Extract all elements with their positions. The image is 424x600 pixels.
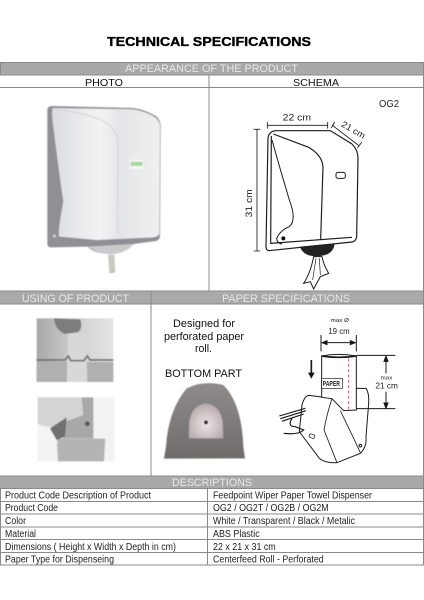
- row: color: [5, 516, 355, 527]
- column heading: schema: SCHEMA: [293, 77, 339, 89]
- dimension labels: 22 cm: [283, 112, 311, 122]
- row: dimensions: 22 x 21 x 31 cm: [213, 542, 276, 553]
- label: bottom part: BOTTOM PART: [165, 368, 242, 380]
- panel: using of product: [0, 291, 151, 461]
- title: TECHNICAL SPECIFICATIONS: [107, 34, 311, 49]
- photo: bottom part of dispenser: [164, 383, 245, 459]
- row: paper type: [5, 554, 324, 566]
- row: material: Material: [5, 529, 36, 540]
- direction arrow: [309, 360, 314, 375]
- row: description: [5, 490, 373, 502]
- roll label: [322, 378, 342, 388]
- dimension labels: 19 cm: [328, 327, 350, 336]
- row: description: Product Code Description of Product: [5, 490, 151, 502]
- dimension labels: max: [381, 375, 393, 381]
- section band: appearance: APPEARANCE OF THE PRODUCT: [125, 63, 298, 75]
- dimension labels: max Ø: [331, 318, 350, 324]
- row: paper type: Centerfeed Roll - Perforated: [213, 554, 324, 566]
- row: material: ABS Plastic: [213, 529, 260, 540]
- specification rows: [5, 490, 373, 566]
- dispenser body: [299, 388, 369, 463]
- note: designed for perforated paper roll: [164, 318, 244, 355]
- section band: descriptions: [0, 476, 424, 489]
- section band: using of product: [0, 291, 151, 305]
- dimension labels: [244, 112, 367, 217]
- section band: appearance: [0, 62, 424, 75]
- section band: using of product: USING OF PRODUCT: [22, 293, 129, 305]
- dimension lines: [321, 335, 356, 351]
- dimension labels: 31 cm: [244, 189, 254, 217]
- photo: loading the paper roll: [38, 397, 115, 461]
- row: product code: OG2 / OG2T / OG2B / OG2M: [213, 503, 329, 514]
- photo: pulling paper from dispenser: [37, 318, 113, 382]
- photo: white paper towel dispenser: [47, 106, 161, 273]
- section band: paper specifications: PAPER SPECIFICATIONS: [222, 293, 350, 305]
- row: paper type: Paper Type for Dispenseing: [5, 554, 114, 566]
- schema: paper roll loading drawing: [279, 318, 398, 463]
- note: designed for perforated paper roll: Designed for: [173, 318, 235, 330]
- note: designed for perforated paper roll: perforated paper: [164, 331, 244, 343]
- section band: descriptions: DESCRIPTIONS: [172, 477, 252, 489]
- section band: paper specifications: [151, 291, 424, 305]
- row: product code: Product Code: [5, 503, 58, 514]
- note: designed for perforated paper roll: roll.: [195, 343, 212, 355]
- dimension labels: 21 cm: [340, 119, 367, 141]
- dimension lines: [254, 122, 362, 251]
- column heading: photo: PHOTO: [85, 77, 123, 89]
- panel: paper specifications: [151, 291, 424, 463]
- dimension labels: 21 cm: [375, 381, 398, 390]
- paper tail: [279, 408, 306, 434]
- paper tail: [304, 257, 329, 289]
- dimension labels: [328, 318, 398, 390]
- model label: OG2: [379, 98, 399, 110]
- row: color: White / Transparent / Black / Metalic: [213, 516, 355, 527]
- paper roll: [322, 354, 356, 411]
- schema: dimensioned dispenser drawing: [244, 112, 367, 289]
- schema: paper roll loading drawing: PAPER: [323, 379, 340, 388]
- dispenser outline: [266, 131, 358, 251]
- black outlet dome: [300, 243, 335, 256]
- row: dimensions: Dimensions ( Height x Width x Depth in cm): [5, 542, 176, 553]
- panel: appearance of the product: [0, 62, 424, 289]
- row: description: Feedpoint Wiper Paper Towel Dispenser: [213, 490, 373, 502]
- panel: descriptions: [0, 476, 424, 566]
- row: color: Color: [5, 516, 27, 527]
- row: material: [5, 529, 260, 540]
- row: product code: [5, 503, 329, 514]
